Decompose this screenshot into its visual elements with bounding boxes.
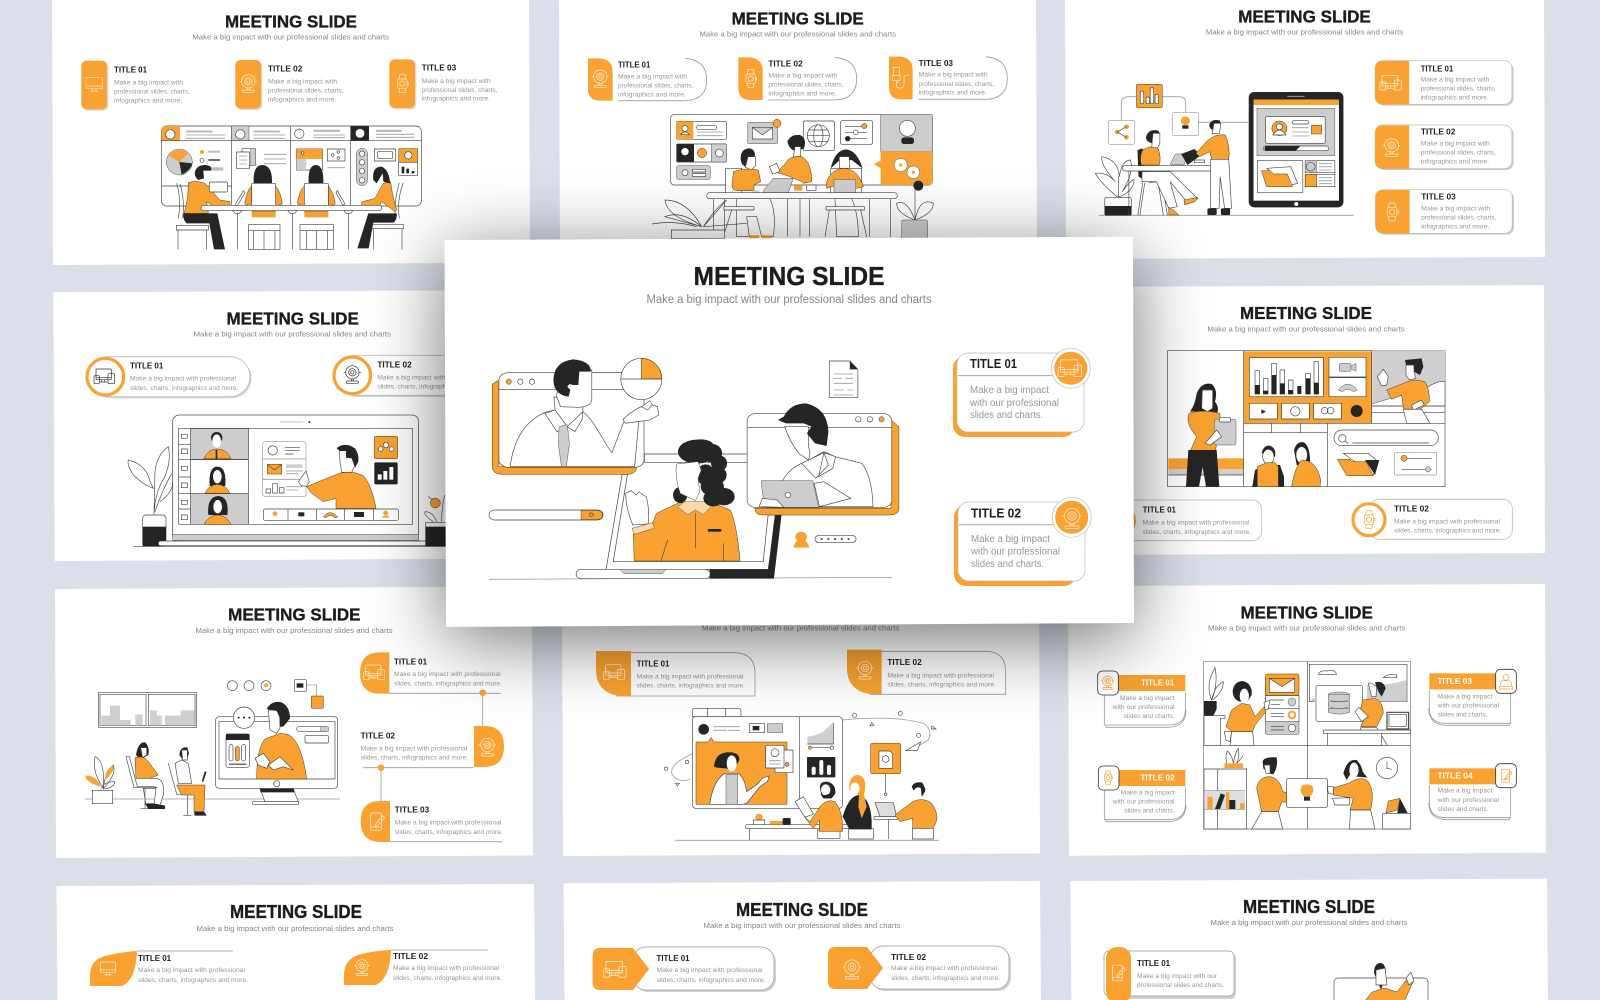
card: title 02: TITLE 02	[1394, 504, 1429, 514]
card: title 02: Make a big impact	[1121, 790, 1175, 796]
card: title 03: TITLE 03	[422, 63, 457, 73]
heading: MEETING SLIDE	[1240, 602, 1373, 622]
card: title 02	[361, 726, 504, 771]
subtitle: Make a big impact with our professional slides and charts	[702, 623, 899, 632]
card: title 01: Make a big impact with professional	[394, 671, 501, 678]
card: title 02: TITLE 02	[971, 507, 1021, 521]
card: title 02: Make a big impact with	[768, 73, 838, 80]
card: title 03: TITLE 03	[395, 805, 430, 815]
card: title 02	[954, 497, 1091, 586]
panel: slide row 4 centre	[564, 881, 1041, 1000]
card: title 02: Make a big impact with	[1421, 140, 1490, 147]
card: title 03	[889, 57, 1007, 99]
card: title 03: Make a big impact with professional	[395, 820, 501, 827]
card: title 02: Make a big impact with professional	[377, 374, 483, 381]
card: title 01: professional slides, charts,	[114, 89, 190, 96]
card: title 02: slides, charts, infographics and more.	[393, 975, 502, 982]
card: title 01: TITLE 01	[1143, 505, 1176, 515]
card: title 01: professional slides, charts,	[618, 82, 694, 89]
card: title 01: TITLE 01	[970, 357, 1017, 371]
card: title 01: TITLE 01	[1141, 679, 1175, 688]
card: title 02	[847, 650, 1006, 694]
card: title 01: slides, charts, infographics and more.	[656, 977, 766, 984]
card: title 02: Make a big impact	[971, 534, 1050, 545]
panel: slide row 1 centre, cards with rounded outline	[559, 0, 1037, 264]
card: title 04	[1429, 764, 1516, 820]
card: title 02: TITLE 02	[268, 64, 303, 74]
card: title 02	[334, 355, 499, 397]
card: title 01	[593, 947, 776, 992]
card: title 02: Make a big impact with professional	[887, 672, 994, 679]
card: title 01: with our professional	[969, 398, 1059, 409]
card: title 03: slides and charts.	[1438, 712, 1488, 718]
card: title 01: TITLE 01	[138, 954, 172, 963]
card: title 03: professional slides, charts,	[919, 81, 994, 88]
card: title 02: Make a big impact with	[268, 79, 337, 86]
card: title 02: Make a big impact with professional	[891, 965, 997, 972]
illustration: colleagues beside tablet dashboard	[1095, 84, 1354, 215]
card: title 01	[1104, 947, 1236, 1000]
card: title 02: TITLE 02	[377, 359, 412, 369]
card: title 02: professional slides, charts,	[768, 82, 844, 89]
heading: MEETING SLIDE	[230, 902, 362, 922]
card: title 02: professional slides, charts,	[268, 88, 344, 95]
card: title 02: slides, charts, infographics and more.	[887, 681, 996, 688]
panel: featured centre slide	[444, 237, 1134, 627]
card: title 03: professional slides, charts,	[1421, 214, 1497, 221]
card: title 02: slides, charts, infographics and more.	[361, 755, 468, 762]
panel: slide row 3 left, timeline cards beside monitor	[55, 586, 533, 858]
card: title 01: Make a big impact with our	[1137, 973, 1217, 980]
subtitle: Make a big impact with our professional slides and charts	[194, 329, 391, 338]
card: title 01	[596, 651, 755, 696]
card: title 01: Make a big impact with professional	[1143, 520, 1249, 527]
heading: MEETING SLIDE	[1243, 897, 1375, 917]
card: title 04: Make a big impact	[1438, 789, 1493, 795]
heading: MEETING SLIDE	[226, 308, 359, 328]
illustration: video meeting on laptop	[489, 358, 899, 579]
card: title 03: TITLE 03	[919, 58, 953, 68]
card: title 04: slides and charts.	[1438, 807, 1489, 813]
panel: slide row 2 left, pill cards above laptop call	[53, 290, 532, 561]
card: title 01: infographics and more.	[618, 91, 686, 98]
card: title 01: TITLE 01	[114, 65, 147, 75]
card: title 01	[1098, 671, 1186, 727]
card: title 02: Make a big impact with professional	[361, 746, 467, 753]
card: title 02: Make a big impact with professional	[1394, 519, 1500, 526]
card: title 02	[344, 950, 502, 985]
card: title 02: slides, charts, infographics and more.	[1394, 528, 1502, 535]
card: title 01: TITLE 01	[637, 659, 670, 669]
illustration: grid of video call panels	[1168, 351, 1445, 487]
card: title 02	[1098, 766, 1186, 822]
card: title 02: with our professional	[970, 546, 1060, 557]
card: title 02: TITLE 02	[393, 952, 429, 961]
subtitle: Make a big impact with our professional slides and charts	[704, 921, 901, 930]
card: title 01: Make a big impact with professional	[656, 967, 762, 974]
card: title 01: Make a big impact with professional	[138, 967, 245, 974]
panel: slide row 2 right, grid illustration above pill cards	[1066, 285, 1545, 555]
card: title 02: infographics and more.	[268, 97, 337, 104]
heading: MEETING SLIDE	[1240, 303, 1372, 323]
card: title 03: Make a big impact	[1438, 694, 1493, 700]
subtitle: Make a big impact with our professional slides and charts	[192, 33, 389, 42]
card: title 01	[87, 357, 252, 398]
heading, mostly hidden behind featured slide: MEETING SLIDE	[734, 602, 867, 622]
card: title 01: Make a big impact with	[1421, 77, 1490, 84]
subtitle: Make a big impact with our professional slides and charts	[196, 924, 394, 933]
card: title 02: slides and charts.	[971, 559, 1044, 570]
card: title 02: TITLE 02	[361, 731, 395, 741]
card: title 01	[90, 951, 248, 986]
card: title 03: Make a big impact with	[919, 72, 988, 79]
subtitle: Make a big impact with our professional slides and charts	[1210, 918, 1408, 927]
illustration: team at table facing dashboards	[161, 126, 421, 249]
card: title 01: Make a big impact with professional	[637, 674, 743, 681]
card: title 02	[1375, 125, 1514, 170]
card: title 01: Make a big impact with	[114, 79, 184, 86]
heading: MEETING SLIDE	[736, 900, 868, 920]
card: title 03: professional slides, charts,	[422, 87, 498, 94]
panel: slide row 1 left, three vertical orange cards	[52, 0, 530, 265]
card: title 03	[389, 59, 498, 109]
subtitle: Make a big impact with our professional slides and charts	[1207, 324, 1405, 333]
card: title 02: with our professional	[1112, 800, 1175, 806]
subtitle: Make a big impact with our professional slides and charts	[699, 30, 896, 39]
card: title 02	[828, 946, 1011, 991]
card: title 04: with our professional	[1437, 798, 1499, 804]
heading: MEETING SLIDE	[228, 605, 360, 625]
illustration: online presenter window with team	[664, 708, 939, 840]
card: title 01: slides, charts, infographics and more.	[637, 683, 745, 690]
card: title 02: infographics and more.	[1421, 158, 1489, 165]
card: title 01: slides, charts, infographics and more.	[1143, 529, 1251, 536]
card: title 01	[81, 61, 190, 111]
card: title 01	[360, 652, 502, 696]
card: title 03: Make a big impact with	[422, 78, 491, 85]
card: title 01: with our professional	[1112, 705, 1175, 711]
card: title 01: professional slides, charts,	[1421, 86, 1496, 93]
card: title 01	[1375, 61, 1514, 106]
card: title 03: TITLE 03	[1421, 193, 1456, 202]
card: title 02: TITLE 02	[891, 953, 927, 962]
panel: slide row 3 centre, window with presenter and team	[562, 586, 1040, 856]
card: title 01: TITLE 01	[130, 361, 164, 371]
card: title 01: professional slides and charts.	[1137, 982, 1224, 989]
card: title 02: TITLE 02	[768, 59, 803, 69]
card: title 01: infographics and more.	[1421, 95, 1489, 102]
card: title 02: infographics and more.	[768, 91, 837, 98]
card: title 01: TITLE 01	[656, 954, 690, 963]
card: title 02	[235, 60, 344, 110]
panel: slide row 4 right	[1070, 879, 1548, 1000]
card: title 03	[361, 801, 503, 842]
card: title 03	[1375, 190, 1514, 235]
card: title 01: slides and charts.	[970, 410, 1043, 421]
card: title 03: infographics and more.	[422, 96, 490, 103]
card: title 02	[1353, 499, 1512, 539]
card: title 04: TITLE 04	[1437, 772, 1473, 781]
card: title 02: TITLE 02	[1140, 773, 1175, 782]
panel: slide row 3 right, four cards around grid	[1068, 584, 1546, 856]
card: title 01: slides, charts, infographics and more.	[138, 977, 248, 984]
card: title 03: infographics and more.	[919, 90, 987, 97]
card: title 02: TITLE 02	[1421, 128, 1456, 137]
card: title 01: TITLE 01	[618, 60, 651, 70]
subtitle: Make a big impact with our professional slides and charts	[195, 626, 393, 635]
illustration: audience watching presenter on monitor	[85, 680, 340, 816]
card: title 03: infographics and more.	[1421, 223, 1490, 230]
subtitle: Make a big impact with our professional slides and charts	[1208, 623, 1405, 632]
card: title 03: Make a big impact with	[1421, 205, 1491, 212]
card: title 01: Make a big impact	[970, 385, 1049, 396]
card: title 03: with our professional	[1437, 703, 1499, 709]
card: title 03: slides, charts, infographics and more.	[395, 829, 503, 836]
card: title 01: slides and charts.	[1124, 714, 1175, 720]
card: title 03: TITLE 03	[1437, 677, 1473, 686]
card: title 01: TITLE 01	[394, 656, 427, 666]
panel: slide row 4 left	[56, 884, 535, 1000]
panel: slide row 1 right, cards beside tablet	[1065, 0, 1545, 259]
card: title 01: Make a big impact with	[618, 73, 688, 80]
illustration: presenter at screen	[1334, 963, 1428, 1000]
illustration: four-panel office scenes	[1204, 662, 1411, 829]
card: title 03	[1429, 669, 1516, 725]
illustration: laptop video call	[128, 415, 452, 546]
card: title 01: Make a big impact	[1120, 696, 1175, 702]
card: title 02: Make a big impact with professional	[393, 965, 499, 972]
card: title 01	[1102, 500, 1262, 541]
subtitle: Make a big impact with our professional slides and charts	[1206, 27, 1403, 36]
card: title 01: TITLE 01	[1421, 64, 1454, 73]
card: title 02: slides, charts, infographics and more.	[891, 975, 1000, 982]
card: title 01	[588, 58, 707, 101]
card: title 01: TITLE 01	[1137, 959, 1171, 968]
featured slide shadow	[445, 253, 1133, 640]
card: title 01: slides, charts, infographics and more.	[130, 385, 239, 392]
card: title 02	[738, 57, 857, 100]
heading: MEETING SLIDE	[1238, 6, 1371, 26]
card: title 01: Make a big impact with professional	[130, 376, 236, 383]
card: title 02: TITLE 02	[887, 657, 922, 667]
card: title 01: infographics and more.	[114, 98, 183, 105]
subtitle: Make a big impact with our professional slides and charts	[646, 294, 932, 306]
heading: MEETING SLIDE	[694, 261, 884, 291]
card: title 01: slides, charts, infographics and more.	[394, 680, 502, 687]
connector lines	[363, 693, 502, 842]
card: title 01	[953, 348, 1090, 437]
card: title 02: slides and charts.	[1124, 809, 1175, 815]
illustration: team around desk with app board	[652, 115, 933, 240]
heading: MEETING SLIDE	[732, 9, 864, 29]
card: title 02: slides, charts, infographics and more.	[377, 384, 486, 391]
heading: MEETING SLIDE	[225, 12, 357, 32]
card: title 02: professional slides, charts,	[1421, 149, 1496, 156]
